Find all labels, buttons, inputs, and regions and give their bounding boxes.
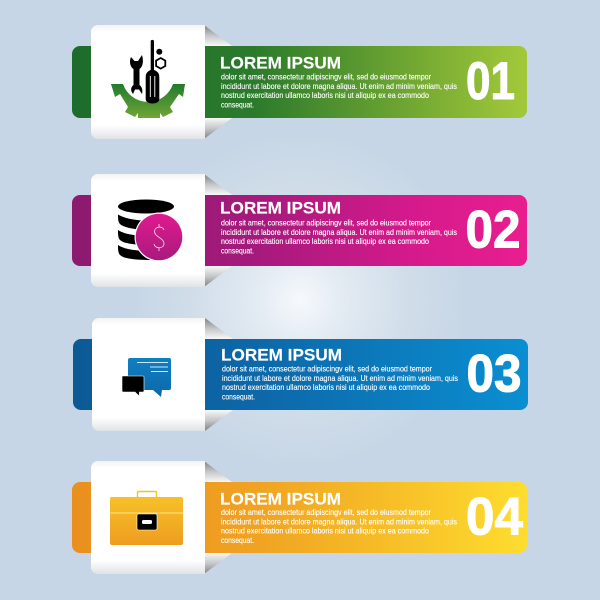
colored band 04 xyxy=(72,482,527,553)
panel: step 02 xyxy=(72,174,527,287)
body text 04: dolor sit amet, consectetur adipiscingv elit, sed do eiusmod tempor xyxy=(221,507,431,517)
icon: coins with dollar xyxy=(118,200,184,262)
body text 04 xyxy=(221,507,457,545)
white card 01 xyxy=(91,25,205,139)
panel: step 03 xyxy=(73,318,528,431)
colored band 03 xyxy=(73,339,528,410)
body text 02: nostrud exercitation ullamco laboris nisi ut aliquip ex ea commodo xyxy=(221,236,429,246)
body text 02: consequat. xyxy=(221,245,254,255)
body text 03: incididunt ut labore et dolore magna aliqua. Ut enim ad minim veniam, quis xyxy=(222,373,458,383)
number 03: 03 xyxy=(466,344,522,404)
body text 03: nostrud exercitation ullamco laboris nisi ut aliquip ex ea commodo xyxy=(222,382,430,392)
number 01: 01 xyxy=(466,52,515,111)
folded corners 03 xyxy=(205,318,233,431)
body text 04: incididunt ut labore et dolore magna aliqua. Ut enim ad minim veniam, quis xyxy=(221,516,457,526)
body text 03 xyxy=(222,364,458,401)
heading 04: LOREM IPSUM xyxy=(220,490,341,508)
number 04: 04 xyxy=(466,488,524,546)
body text 01: incididunt ut labore et dolore magna aliqua. Ut enim ad minim veniam, quis xyxy=(221,81,457,91)
icon: tools and gear xyxy=(111,40,185,118)
folded corners 01 xyxy=(204,25,232,139)
heading 02: LOREM IPSUM xyxy=(220,198,341,218)
panel: step 01 xyxy=(72,25,527,139)
body text 01: dolor sit amet, consectetur adipiscingv elit, sed do eiusmod tempor xyxy=(221,72,431,82)
body text 01 xyxy=(221,72,457,109)
folded corners 04 xyxy=(204,461,232,574)
body text 03: dolor sit amet, consectetur adipiscingv elit, sed do eiusmod tempor xyxy=(222,364,432,374)
white card 04 xyxy=(91,461,205,574)
folded corners 02 xyxy=(204,174,232,287)
body text 03: consequat. xyxy=(222,391,255,401)
heading 03: LOREM IPSUM xyxy=(221,346,342,364)
colored band 02 xyxy=(72,195,527,266)
body text 02: dolor sit amet, consectetur adipiscingv elit, sed do eiusmod tempor xyxy=(221,218,431,228)
body text 04: nostrud exercitation ullamco laboris nisi ut aliquip ex ea commodo xyxy=(221,526,429,536)
icon: chat bubbles xyxy=(122,358,171,397)
body text 01: nostrud exercitation ullamco laboris nisi ut aliquip ex ea commodo xyxy=(221,90,429,100)
white card 02 xyxy=(91,174,205,287)
number 02: 02 xyxy=(466,200,520,260)
panel: step 04 xyxy=(72,461,527,574)
body text 04: consequat. xyxy=(221,535,254,545)
body text 01: consequat. xyxy=(221,99,254,109)
body text 02: incididunt ut labore et dolore magna aliqua. Ut enim ad minim veniam, quis xyxy=(221,227,457,237)
white card 03 xyxy=(92,318,205,431)
colored band 01 xyxy=(72,46,527,118)
heading 01: LOREM IPSUM xyxy=(220,54,341,72)
body text 02 xyxy=(221,218,457,255)
icon: briefcase xyxy=(110,492,183,545)
